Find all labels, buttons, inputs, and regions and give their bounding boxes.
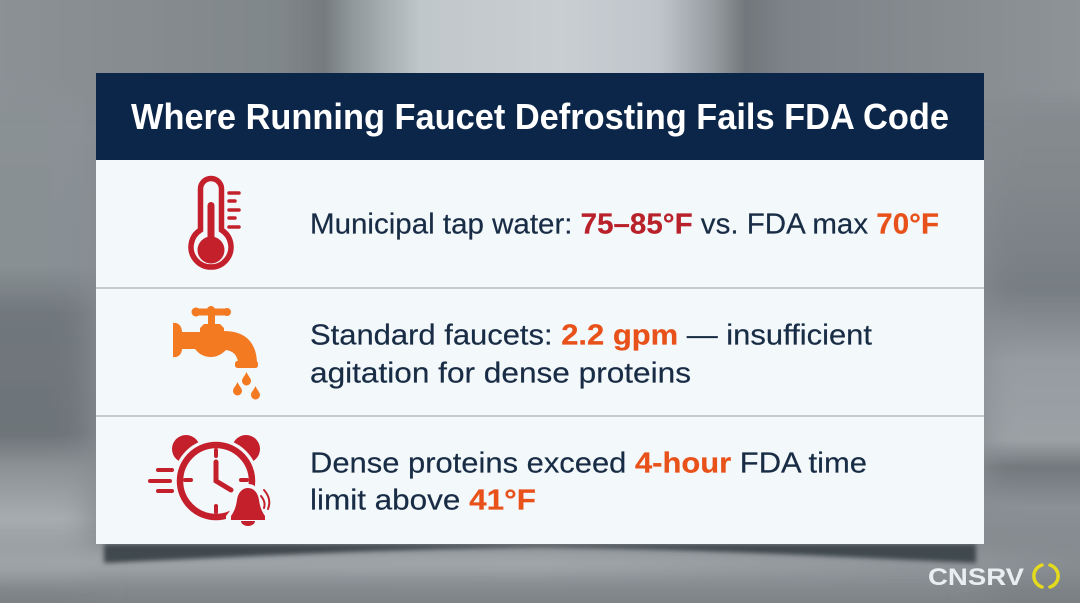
icon: faucet with drips (173, 306, 260, 400)
logo: CNSRV: CNSRV (928, 564, 1024, 591)
icon: thermometer (191, 178, 239, 267)
header bar (96, 73, 984, 160)
text: standard faucets (310, 320, 872, 390)
row: faucet flow (173, 306, 872, 400)
row: tap water temperature (191, 178, 939, 267)
logo: CNSRV (928, 564, 1058, 591)
text: standard faucets: Standard faucets: 2.2 gpm — insufficient (310, 320, 872, 352)
panel shadow (104, 544, 976, 563)
icon: alarm clock with bell (150, 435, 270, 526)
panel: card (96, 73, 984, 544)
text: dense proteins: Dense proteins exceed 4-hour FDA time (310, 448, 867, 480)
row: time limit (150, 435, 867, 526)
text: dense proteins: limit above 41°F (310, 484, 536, 516)
text: standard faucets: agitation for dense proteins (310, 358, 691, 390)
text: dense proteins (310, 448, 867, 516)
divider (96, 415, 984, 417)
title: Where Running Faucet Defrosting Fails FDA Code (131, 96, 949, 137)
divider (96, 287, 984, 289)
text: municipal tap water: Municipal tap water: 75–85°F vs. FDA max 70°F (310, 208, 939, 240)
icon: yellow ring (1034, 565, 1058, 587)
